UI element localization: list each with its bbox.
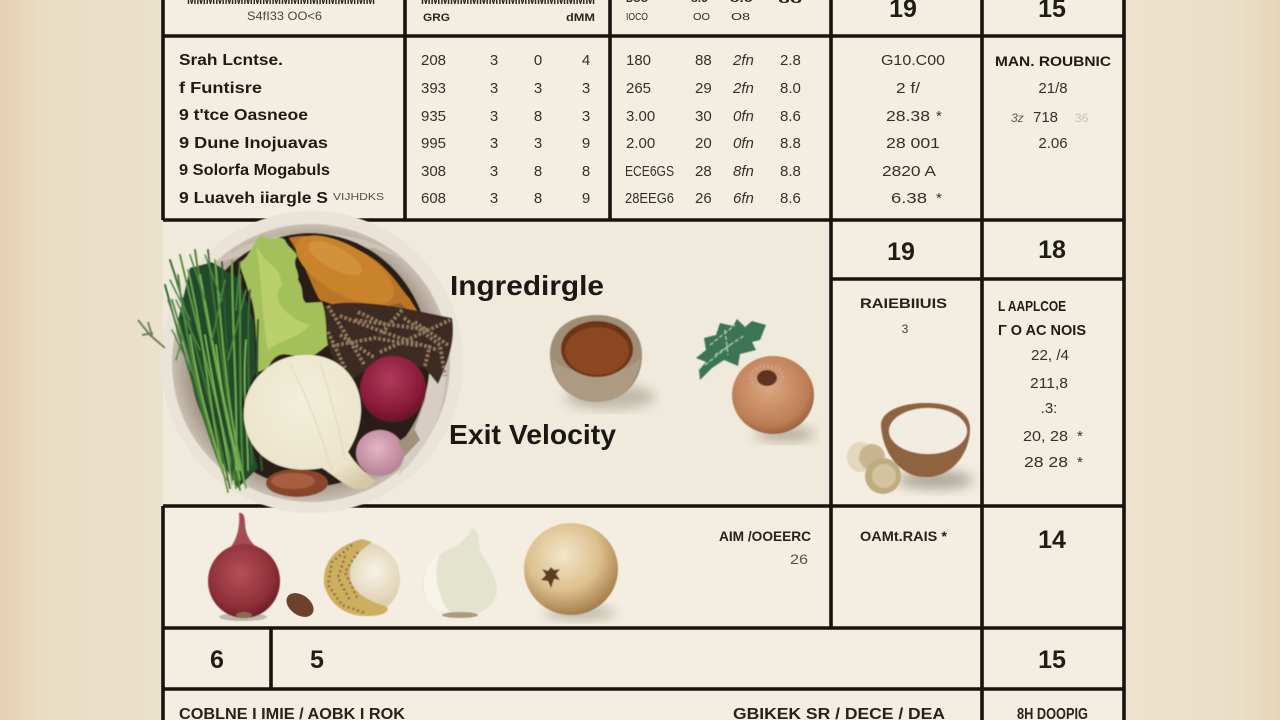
fourth values column [995,53,1111,152]
first values column: 4 [582,52,590,69]
second values column: 0fn [733,108,754,125]
panel: values cell lower right: * [1077,428,1083,445]
second values column: 28EEG6 [625,190,674,207]
brown grain [323,303,453,384]
icon: garlic clove [423,528,497,618]
second values column: 0fn [733,135,754,152]
shallot [356,430,404,476]
third values column: * [936,190,942,207]
ingredient name column: VIJHDKS [333,191,384,203]
first values column: 935 [421,108,446,125]
first values column: 3 [490,52,498,69]
first values column: 8 [534,190,542,207]
header cell: second values column [626,0,802,23]
second values column: 29 [695,80,712,97]
second values column: 8.0 [780,80,801,97]
header cell: name column [187,0,375,23]
icon: bowl of vegetables [138,211,463,513]
ingredient name column: 9 Dune Inojuavas [179,135,328,152]
first values column: 608 [421,190,446,207]
header cell: name column: S4fI33 OO<6 [247,9,322,23]
number 5: 5 [310,646,324,674]
second values column: 2fn [732,52,754,69]
second values column: ECE6GS [625,163,674,180]
heading: Exit Velocity: Exit Velocity [449,419,616,450]
first values column: 8 [582,163,590,180]
fourth values column: 21/8 [1038,80,1068,97]
ingredient name column [179,52,384,207]
panel: onion row [208,513,811,622]
header cell: first values column [421,0,595,24]
second values column: 8.8 [780,135,801,152]
first values column: 3 [582,80,590,97]
fourth values column: MAN. ROUBNIC [995,53,1111,69]
second values column [625,52,801,207]
header cell: first values column: GRG [423,12,450,24]
third values column: * [936,108,942,125]
fourth values column: 2.06 [1038,135,1068,152]
first values column: 393 [421,80,446,97]
dill stems [165,250,262,492]
second values column: 8.6 [780,190,801,207]
third values column: 2 f/ [896,80,921,97]
third values column: 28.38 [886,108,930,125]
icon: red onion [208,513,280,621]
table cell backgrounds [163,0,1124,720]
panel: values cell lower right: Γ O AC NOIS [998,322,1086,339]
first values column: 0 [534,52,542,69]
first values column: 8 [534,108,542,125]
icon: bowl of brown powder [550,315,655,409]
header cell: second values column: O8 [731,11,750,23]
ingredient name column: 9 Luaveh iiargle S [179,190,328,207]
ingredient name column: f Funtisre [179,80,262,97]
first values column: 208 [421,52,446,69]
fourth values column: 3z [1011,111,1024,125]
icon: brown seed [282,588,318,622]
footer row text [179,706,1088,720]
second values column: 6fn [733,190,754,207]
small number 19: 19 [887,238,915,266]
clipped header row [187,0,1066,24]
lettuce [240,235,328,372]
second values column: 3.00 [626,108,655,125]
panel: values cell lower right: 22, /4 [1031,347,1069,364]
third values column [881,52,945,207]
second values column: 2.00 [626,135,655,152]
first values column: 3 [490,135,498,152]
first values column: 3 [534,135,542,152]
first values column: 3 [490,108,498,125]
first values column: 3 [490,163,498,180]
red onion [360,356,426,422]
first values column [421,52,590,207]
number 6: 6 [210,646,224,674]
icon: seeded pearl onion [324,539,400,616]
panel: values cell lower right: .3: [1041,400,1057,417]
third values column: G10.C00 [881,52,945,69]
loose herb sprig [138,320,165,348]
first values column: 8 [534,163,542,180]
white onion [244,355,375,489]
ingredient name column: Srah Lcntse. [179,52,283,69]
heading: Ingredirgle: Ingredirgle [450,270,604,301]
second values column: 8.6 [780,108,801,125]
panel: values cell lower right [998,298,1086,471]
table grid lines [163,0,1124,720]
panel: values cell lower right: 211,8 [1030,375,1068,392]
first values column: 3 [534,80,542,97]
panel: values cell lower right: 20, 28 [1023,428,1068,445]
panel: salt bowl cell [847,295,973,494]
second values column: 20 [695,135,712,152]
fourth values column: 36 [1075,111,1089,125]
header cell: second values column: OO [693,11,710,23]
cell label: OAMt.RAIS: OAMt.RAIS * [860,528,948,544]
icon: copper onion [732,356,815,441]
ingredient name column: 9 t'tce Oasneoe [179,107,308,124]
icon: green herb [696,319,766,380]
second values column: 26 [695,190,712,207]
ingredient name column: 9 Solorfa Mogabuls [179,162,330,179]
fourth values column: 718 [1033,109,1058,126]
first values column: 3 [582,108,590,125]
panel: values cell lower right: 28 28 [1024,454,1068,471]
third values column: 6.38 [891,190,927,207]
panel: values cell lower right: L AAPLCOE [998,298,1066,315]
second values column: 2fn [732,80,754,97]
icon: tan onion [524,523,618,619]
cell label: RAIEBIIUIS [860,295,947,311]
sausage piece [266,469,328,497]
header cell: second values column: IOCO [626,11,648,23]
third values column: 2820 A [882,163,936,180]
panel: values cell lower right: * [1077,454,1083,471]
first values column: 3 [490,190,498,207]
cell value: 26: 26 [790,551,808,567]
number 15: 15 [1038,646,1066,674]
icon: salt bowl and slices [847,403,973,494]
second values column: 180 [626,52,651,69]
dill mass [178,262,258,488]
number 14: 14 [1038,526,1066,554]
second values column: 265 [626,80,651,97]
header cell: first values column: dMM [566,12,595,24]
second values column: 30 [695,108,712,125]
second values column: 88 [695,52,712,69]
second values column: 28 [695,163,712,180]
first values column: 9 [582,135,590,152]
orange root [289,236,423,326]
first values column: 3 [490,80,498,97]
cell value: 3 [902,322,909,336]
second values column: 8.8 [780,163,801,180]
first values column: 308 [421,163,446,180]
first values column: 995 [421,135,446,152]
first values column: 9 [582,190,590,207]
small number 18: 18 [1038,236,1066,264]
cell label: AIM /OOEERC: AIM /OOEERC [719,528,811,544]
second values column: 2.8 [780,52,801,69]
second values column: 8fn [733,163,754,180]
third values column: 28 001 [886,135,940,152]
panel: ingredient illustration with labels [138,211,815,513]
